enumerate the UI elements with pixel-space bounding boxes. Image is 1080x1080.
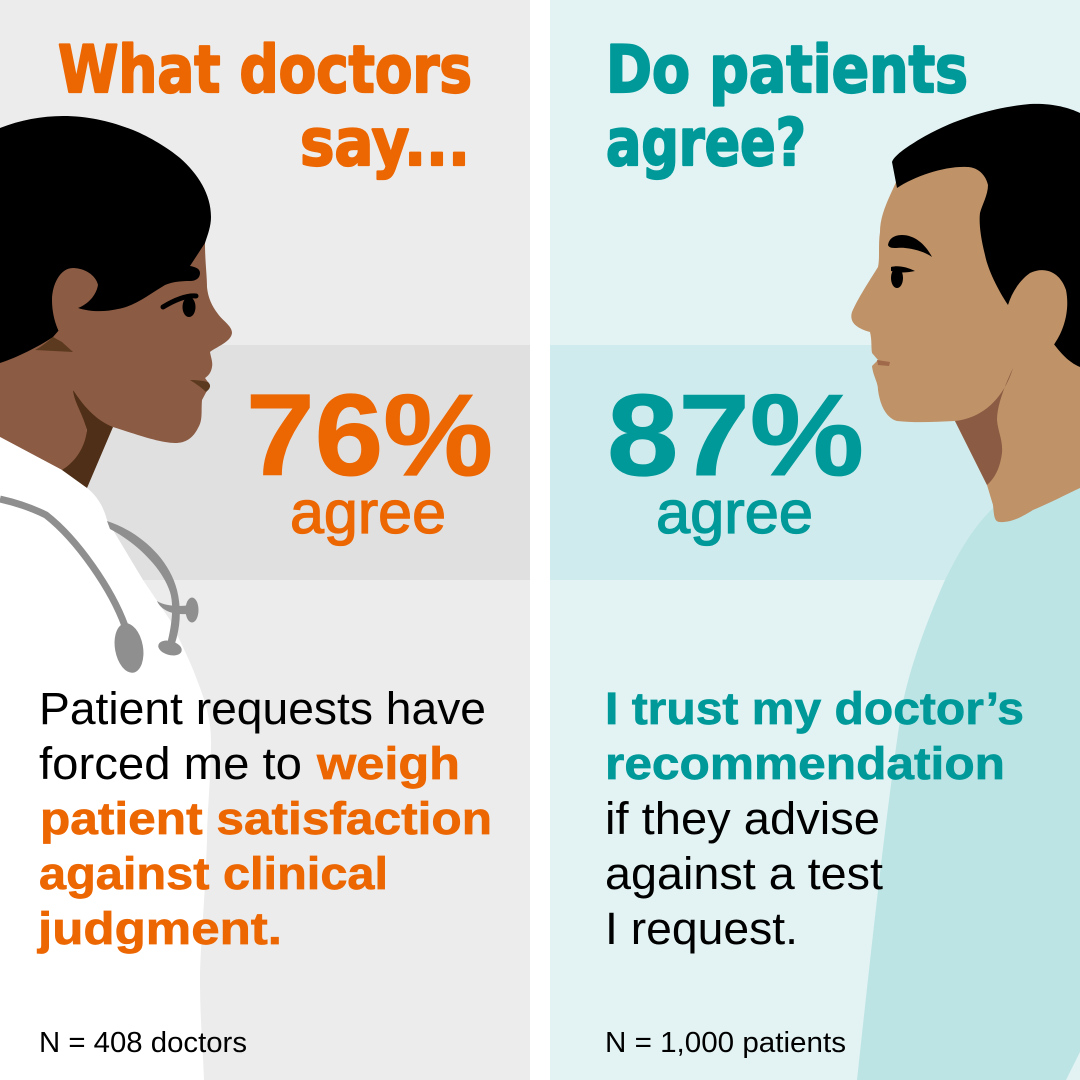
patient eyebrow — [888, 235, 932, 257]
patient lip — [877, 360, 890, 366]
doctor hair — [0, 116, 211, 363]
panel: doctors — [0, 0, 530, 1080]
patient hair — [892, 104, 1080, 367]
heading: do patients agree — [606, 33, 968, 181]
patient shirt — [857, 488, 1080, 1080]
statement: patients: I trust my doctor’s — [605, 683, 1024, 734]
doctor eye — [163, 296, 196, 317]
illustration: doctor — [0, 116, 232, 1080]
statement: doctors: forced me to — [39, 738, 302, 789]
doctor neck shadow — [58, 390, 113, 488]
panel: patients — [550, 0, 1080, 1080]
statement: doctors: patient satisfaction — [40, 793, 492, 844]
heading: do patients agree: Do patients — [606, 33, 968, 108]
statement: patients: against a test — [605, 848, 884, 899]
sample size: patients: N = 1,000 patients — [605, 1027, 846, 1059]
statement: patients: if they advise — [605, 793, 880, 844]
illustration: patient — [851, 104, 1080, 1080]
statement: doctors: weigh — [316, 738, 460, 789]
doctor lip — [190, 380, 210, 392]
stat: 87% agree: 87% — [607, 370, 864, 500]
sample size: doctors: N = 408 doctors — [39, 1027, 247, 1059]
statement: patients: recommendation — [605, 738, 1005, 789]
statement: doctors: against clinical — [39, 848, 388, 899]
stethoscope — [0, 499, 198, 675]
heading: what doctors say — [58, 33, 472, 181]
statement: doctors: judgment. — [37, 903, 282, 954]
stat: 76% agree: agree — [290, 479, 446, 546]
statement: patients: I request. — [605, 903, 798, 954]
statement: doctors: Patient requests have — [39, 683, 486, 734]
stat: 87% agree — [607, 370, 864, 546]
statement: doctors — [37, 683, 492, 954]
statement: patients — [605, 683, 1024, 954]
doctor coat — [0, 437, 211, 1080]
doctor face — [0, 200, 232, 470]
heading: do patients agree: agree? — [606, 106, 806, 181]
stat: 76% agree — [246, 370, 493, 546]
doctor ear — [40, 268, 98, 354]
stat: 76% agree: 76% — [246, 370, 493, 500]
patient ear — [1000, 270, 1067, 360]
heading: what doctors say: say... — [300, 106, 470, 181]
patient neck shadow — [955, 368, 1013, 485]
heading: what doctors say: What doctors — [58, 33, 472, 108]
patient face and neck — [851, 140, 1080, 522]
patient eye — [891, 266, 915, 288]
stat: 87% agree: agree — [656, 479, 813, 546]
